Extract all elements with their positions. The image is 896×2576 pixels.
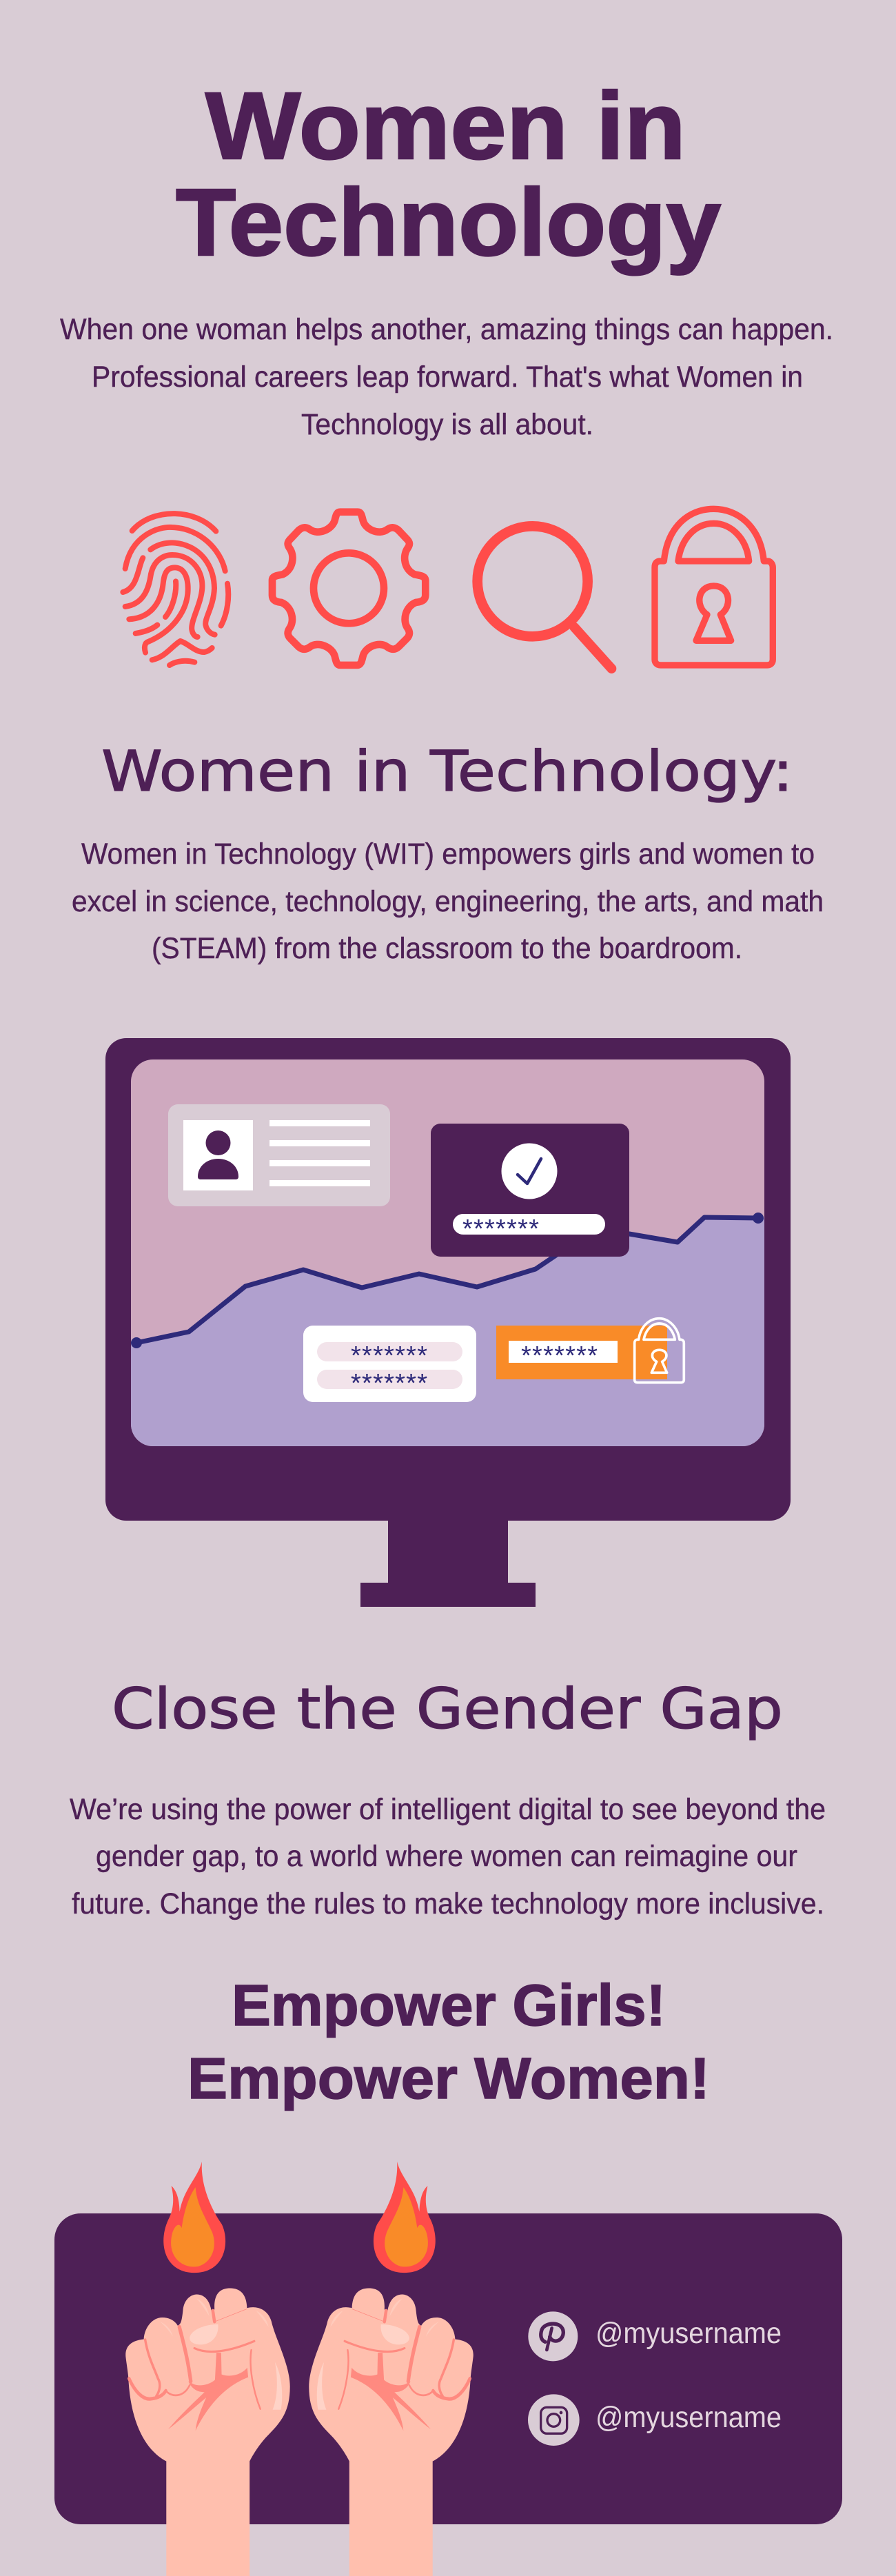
icon: fingerprint bbox=[123, 514, 228, 665]
verified password card bbox=[431, 1124, 629, 1257]
illustration: right raised fist with flame bbox=[309, 2162, 474, 2576]
profile card bbox=[168, 1104, 390, 1206]
fist bbox=[125, 2288, 290, 2576]
icon: pinterest bbox=[528, 2311, 578, 2361]
intro paragraph bbox=[60, 313, 833, 441]
footer panel bbox=[54, 2213, 842, 2524]
paragraph: gender gap: future. Change the rules to make technology more inclusive. bbox=[72, 1887, 824, 1920]
title: Women in bbox=[205, 73, 686, 179]
locked password field: ******* bbox=[521, 1341, 598, 1370]
flame bbox=[163, 2162, 225, 2273]
slogan bbox=[187, 1973, 710, 2111]
illustration: left raised fist with flame bbox=[125, 2162, 290, 2576]
icon: padlock bbox=[655, 509, 773, 665]
paragraph: WIT mission: Women in Technology (WIT) empowers girls and women to bbox=[81, 838, 815, 871]
title bbox=[176, 73, 721, 276]
paragraph: WIT mission: excel in science, technology, engineering, the arts, and math bbox=[72, 885, 824, 918]
paragraph: gender gap bbox=[70, 1793, 826, 1920]
intro paragraph: Technology is all about. bbox=[301, 408, 593, 441]
heading: Close the Gender Gap: Close the Gender Gap bbox=[112, 1677, 783, 1742]
verified password card: ******* bbox=[462, 1215, 539, 1244]
locked password field bbox=[496, 1319, 684, 1383]
monitor stand bbox=[360, 1517, 536, 1607]
fist bbox=[309, 2288, 474, 2576]
small padlock bbox=[635, 1319, 684, 1383]
password form card: ******* bbox=[351, 1341, 427, 1370]
flame bbox=[374, 2162, 436, 2273]
paragraph: WIT mission bbox=[72, 838, 824, 965]
icon: magnifying glass bbox=[478, 526, 611, 669]
screen with area chart bbox=[131, 1059, 765, 1446]
icon: instagram bbox=[528, 2394, 580, 2446]
heading: Women in Technology: Women in Technology: bbox=[101, 740, 793, 804]
icon: gear bbox=[272, 512, 425, 665]
intro paragraph: Professional careers leap forward. That's what Women in bbox=[92, 361, 803, 394]
password form card bbox=[303, 1326, 476, 1402]
instagram handle: @myusername bbox=[595, 2401, 782, 2434]
illustration: computer monitor bbox=[105, 1038, 791, 1607]
pinterest handle: @myusername bbox=[595, 2317, 782, 2350]
paragraph: WIT mission: (STEAM) from the classroom to the boardroom. bbox=[152, 932, 742, 965]
slogan: Empower Women! bbox=[187, 2046, 710, 2111]
slogan: Empower Girls! bbox=[232, 1973, 666, 2038]
title: Technology bbox=[176, 170, 721, 276]
password form card: ******* bbox=[351, 1369, 427, 1398]
monitor frame bbox=[105, 1038, 791, 1521]
intro paragraph: When one woman helps another, amazing things can happen. bbox=[60, 313, 833, 346]
paragraph: gender gap: We’re using the power of intelligent digital to see beyond the bbox=[70, 1793, 826, 1826]
paragraph: gender gap: gender gap, to a world where women can reimagine our bbox=[96, 1840, 797, 1873]
